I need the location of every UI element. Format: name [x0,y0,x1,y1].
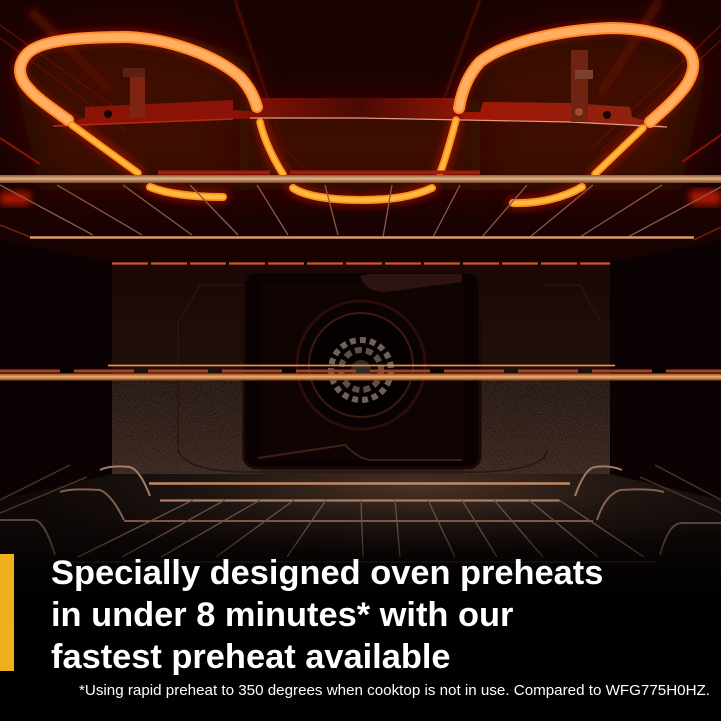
upper rack grid [0,172,721,264]
heating element [20,28,693,203]
headline: in under 8 minutes* with our [51,596,513,634]
right loop [440,28,693,174]
oven back wall [0,240,721,510]
lower rack rails [0,366,721,371]
upper rack front bar [0,175,721,183]
bottom gradient [0,525,721,621]
left loop [20,37,283,174]
bottom rack [0,465,721,600]
convection fan [297,301,425,429]
headline: fastest preheat available [51,638,451,676]
element bracket [53,50,667,127]
lower rack front bar [0,374,721,380]
headline [51,554,603,676]
accent bar [0,554,14,671]
heating element glow [20,28,693,203]
lower runs [150,187,582,203]
ceiling [0,0,721,270]
footnote: *Using rapid preheat to 350 degrees when cooktop is not in use. Compared to WFG775H0HZ. [79,682,710,699]
headline: Specially designed oven preheats [51,554,603,592]
bracket tabs [104,50,611,122]
